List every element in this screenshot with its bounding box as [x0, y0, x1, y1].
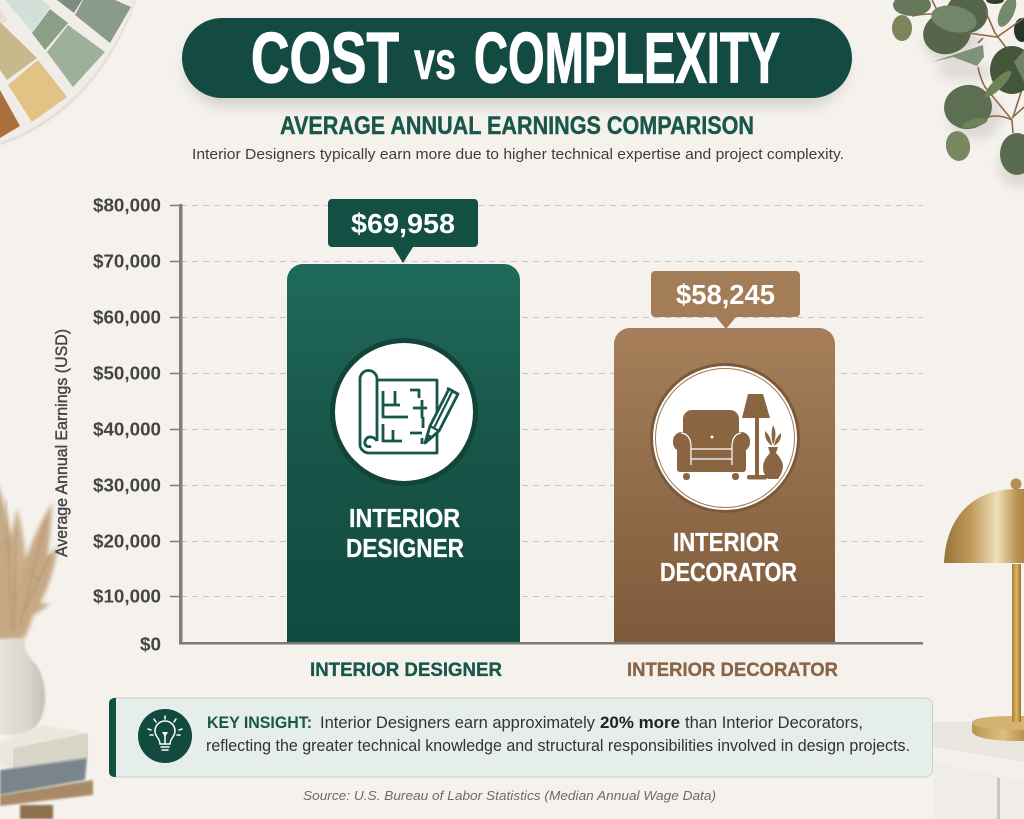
- source note: Source: U.S. Bureau of Labor Statistics (Median Annual Wage Data): [303, 788, 716, 803]
- decoration: marble table: [930, 722, 1024, 819]
- value callout: designer: $69,958: [351, 208, 455, 239]
- x axis line: [179, 642, 923, 644]
- icon: light bulb: [138, 709, 192, 763]
- insight text: 20% more: [600, 714, 680, 732]
- y axis tick labels: $10,000: [93, 586, 161, 606]
- insight text: [206, 714, 910, 755]
- insight text: KEY INSIGHT:: [207, 714, 312, 732]
- insight text: reflecting the greater technical knowledge and structural responsibilities involved in design projects.: [206, 737, 910, 755]
- insight text: than Interior Decorators,: [685, 714, 863, 732]
- y axis tick labels: $30,000: [93, 474, 161, 496]
- icon: armchair, lamp and vase: [650, 363, 800, 513]
- bar label: designer: INTERIOR: [349, 505, 460, 533]
- title banner: vs: [414, 31, 456, 91]
- title banner: [182, 18, 852, 106]
- insight text: Interior Designers earn approximately: [320, 714, 596, 732]
- y axis tick labels: $70,000: [93, 250, 161, 272]
- decoration: colour swatch fan: [0, 0, 136, 145]
- decoration: pampas grass, vase and books: [0, 478, 93, 819]
- value callout: designer: [328, 199, 478, 263]
- bar label: decorator: [660, 529, 797, 587]
- bar label: designer: DESIGNER: [346, 535, 464, 563]
- bar: interior decorator: [614, 271, 835, 642]
- y axis title: Average Annual Earnings (USD): [53, 329, 71, 557]
- x axis label: decorator: INTERIOR DECORATOR: [627, 659, 838, 681]
- y axis tick labels: $20,000: [93, 530, 161, 552]
- y axis: [170, 204, 182, 644]
- decoration: eucalyptus branch: [892, 0, 1024, 187]
- bar label: designer: [346, 505, 464, 563]
- y axis tick labels: $50,000: [93, 362, 161, 384]
- y axis tick labels: $0: [140, 634, 161, 654]
- value callout: decorator: $58,245: [676, 279, 775, 310]
- y axis tick labels: $40,000: [93, 418, 161, 440]
- y axis tick labels: [93, 194, 161, 654]
- title banner: COST: [251, 20, 399, 98]
- bar chart: [53, 194, 923, 681]
- bar: interior designer: [287, 199, 520, 642]
- decoration: brass lamp: [944, 478, 1024, 741]
- bar label: decorator: INTERIOR: [673, 529, 779, 557]
- value callout: decorator: [651, 271, 800, 329]
- x axis label: designer: INTERIOR DESIGNER: [310, 659, 502, 681]
- bar label: decorator: DECORATOR: [660, 559, 797, 587]
- y axis tick labels: $60,000: [93, 306, 161, 328]
- description: Interior Designers typically earn more due to higher technical expertise and project complexity.: [192, 146, 844, 163]
- key insight panel: [109, 698, 932, 777]
- y axis tick labels: $80,000: [93, 194, 161, 216]
- subtitle heading: AVERAGE ANNUAL EARNINGS COMPARISON: [280, 112, 754, 140]
- title banner: COMPLEXITY: [474, 20, 780, 98]
- icon: blueprint and pencil: [330, 338, 478, 486]
